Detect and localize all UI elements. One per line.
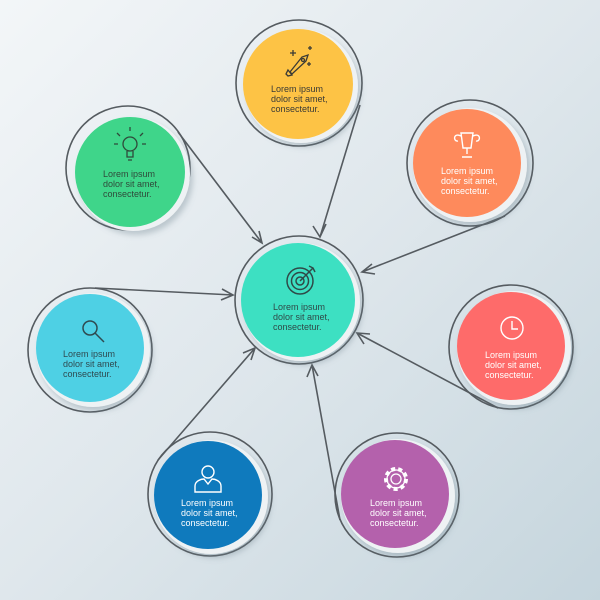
- connector: red: [357, 285, 573, 409]
- connector: yellow: [236, 20, 362, 237]
- node: light blue search: Lorem ipsum: [63, 349, 115, 359]
- icon: magnifier: [83, 321, 104, 342]
- node: orange trophy: consectetur.: [441, 186, 490, 196]
- node: red clock: consectetur.: [485, 370, 534, 380]
- connector: green: [66, 106, 262, 243]
- node: green bulb: Lorem ipsum: [103, 169, 155, 179]
- node: orange trophy: [413, 108, 527, 222]
- connector: purple: [307, 365, 459, 557]
- node: light blue search: [36, 293, 150, 407]
- icon: clock: [501, 317, 523, 339]
- node: purple gear: consectetur.: [370, 518, 419, 528]
- node: orange trophy: dolor sit amet,: [441, 176, 498, 186]
- icon: user: [195, 466, 221, 492]
- icon: target: [287, 266, 315, 294]
- center ring: [235, 236, 363, 364]
- node: purple gear: dolor sit amet,: [370, 508, 427, 518]
- icon: gear: [386, 469, 406, 489]
- node: center target: consectetur.: [273, 322, 322, 332]
- node: orange trophy: Lorem ipsum: [441, 166, 493, 176]
- node: dark blue user: consectetur.: [181, 518, 230, 528]
- node: dark blue user: dolor sit amet,: [181, 508, 238, 518]
- node: red clock: Lorem ipsum: [485, 350, 537, 360]
- icon: trophy: [455, 133, 479, 157]
- node: dark blue user: [154, 440, 268, 554]
- node: center target: Lorem ipsum: [273, 302, 325, 312]
- node: purple gear: Lorem ipsum: [370, 498, 422, 508]
- node: purple gear: [341, 439, 455, 553]
- node: yellow rocket: dolor sit amet,: [271, 94, 328, 104]
- node: yellow rocket: [243, 29, 358, 143]
- node: center target: dolor sit amet,: [273, 312, 330, 322]
- icon: rocket: [286, 46, 312, 76]
- node: red clock: [457, 291, 571, 405]
- node: center target: [241, 243, 360, 361]
- connector: light blue: [28, 288, 233, 412]
- connector: orange: [362, 100, 533, 274]
- node: yellow rocket: consectetur.: [271, 104, 320, 114]
- node: light blue search: dolor sit amet,: [63, 359, 120, 369]
- node: dark blue user: Lorem ipsum: [181, 498, 233, 508]
- node: yellow rocket: Lorem ipsum: [271, 84, 323, 94]
- connector: dark blue: [148, 348, 272, 556]
- node: light blue search: consectetur.: [63, 369, 112, 379]
- node: green bulb: consectetur.: [103, 189, 152, 199]
- icon: light bulb: [114, 127, 146, 160]
- node: green bulb: dolor sit amet,: [103, 179, 160, 189]
- node: green bulb: [75, 117, 190, 231]
- node: red clock: dolor sit amet,: [485, 360, 542, 370]
